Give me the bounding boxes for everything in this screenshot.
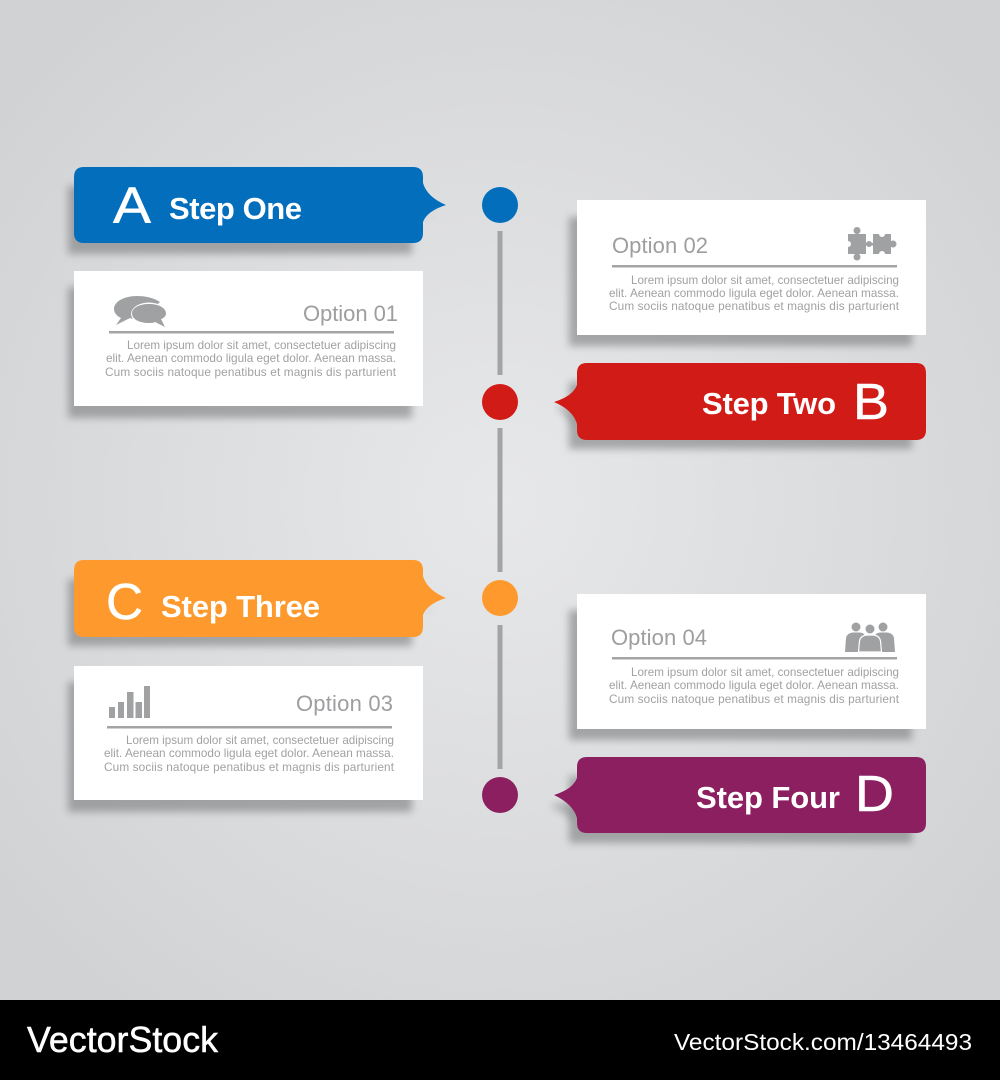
timeline node: red [482, 384, 518, 420]
option title: Option 04 [611, 625, 707, 650]
footer bar [0, 1000, 1000, 1080]
body text: elit. Aenean commodo ligula eget dolor. Aenean massa. [104, 746, 394, 760]
body text: elit. Aenean commodo ligula eget dolor. Aenean massa. [106, 351, 396, 365]
heading: step two: Step Two [702, 386, 836, 421]
panel: option 01 [68, 271, 423, 418]
heading: step four: Step Four [696, 780, 840, 815]
panel: option 03 [68, 666, 423, 812]
option title: Option 02 [612, 233, 708, 258]
body text: Cum sociis natoque penatibus et magnis dis parturient [104, 760, 395, 774]
icon: speech bubbles [114, 296, 167, 327]
body text: Lorem ipsum dolor sit amet, consectetuer adipiscing [126, 733, 394, 747]
body text: Cum sociis natoque penatibus et magnis dis parturient [609, 692, 900, 706]
body text: elit. Aenean commodo ligula eget dolor. Aenean massa. [609, 286, 899, 300]
timeline node: orange [482, 580, 518, 616]
letter B: B [853, 373, 889, 430]
body text [609, 273, 900, 313]
timeline node: purple [482, 777, 518, 813]
timeline [482, 187, 518, 813]
heading: step three: Step Three [161, 589, 320, 624]
logo text: VectorStock [27, 1019, 219, 1060]
panel: option 04 [569, 594, 926, 740]
body text: Cum sociis natoque penatibus et magnis dis parturient [609, 299, 900, 313]
option title: Option 01 [303, 301, 398, 326]
timeline connector 1 [498, 231, 502, 375]
letter C: C [106, 573, 143, 630]
body text [609, 665, 900, 706]
image reference: VectorStock.com/13464493 [674, 1029, 972, 1055]
body text: elit. Aenean commodo ligula eget dolor. Aenean massa. [609, 678, 899, 692]
timeline node: blue [482, 187, 518, 223]
timeline connector 2 [498, 428, 502, 572]
step one banner [68, 167, 446, 254]
letter A: A [113, 177, 151, 234]
icon: puzzle pieces [845, 227, 896, 260]
body text: Lorem ipsum dolor sit amet, consectetuer adipiscing [127, 338, 396, 352]
body text [105, 338, 397, 379]
heading: step one: Step One [169, 191, 302, 226]
step three banner [68, 560, 446, 646]
body text: Cum sociis natoque penatibus et magnis dis parturient [105, 365, 397, 379]
panel: option 02 [569, 200, 926, 346]
option title: Option 03 [296, 691, 393, 716]
step two banner [554, 363, 926, 449]
timeline connector 3 [498, 625, 502, 769]
letter D: D [855, 765, 894, 822]
icon: bar chart [109, 686, 150, 718]
step four banner [550, 757, 926, 843]
body text: Lorem ipsum dolor sit amet, consectetuer adipiscing [631, 665, 899, 679]
icon: people group [845, 622, 895, 652]
body text [104, 733, 395, 774]
body text: Lorem ipsum dolor sit amet, consectetuer adipiscing [631, 273, 899, 287]
